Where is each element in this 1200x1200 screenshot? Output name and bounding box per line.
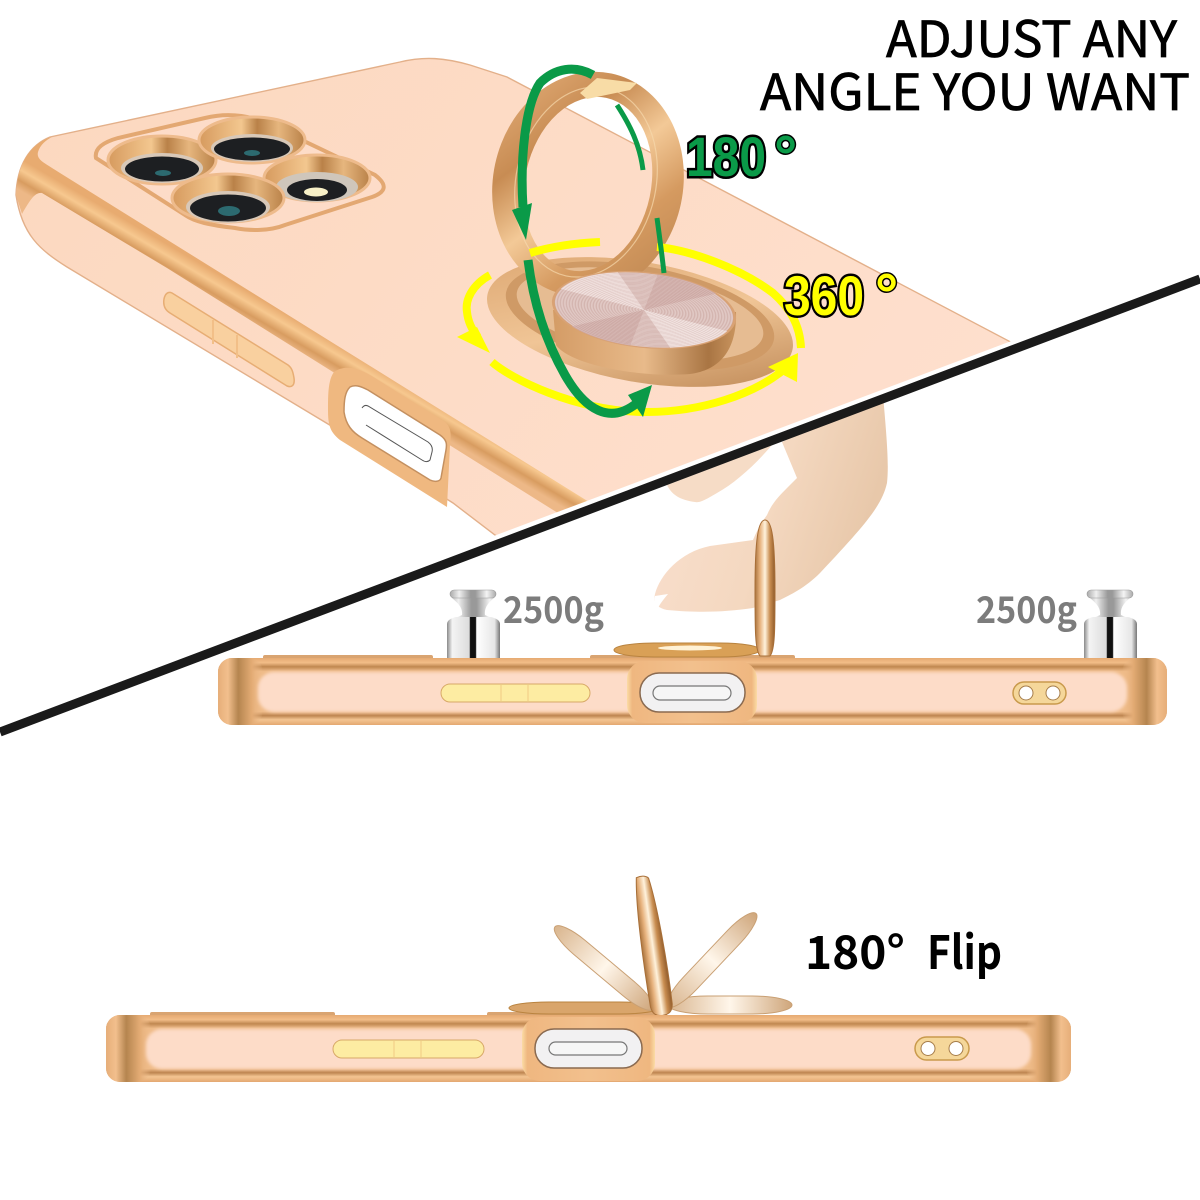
label: 2500g right: 2500g bbox=[976, 580, 1077, 634]
label: 180 degrees: ° bbox=[774, 124, 797, 189]
weight left bbox=[447, 590, 500, 658]
lens 1 bbox=[108, 136, 216, 184]
port bbox=[627, 661, 757, 723]
label: 180 degrees: 180 bbox=[686, 125, 766, 188]
volume button bbox=[441, 684, 590, 702]
camera module bbox=[96, 115, 384, 230]
gold rim bbox=[16, 137, 610, 530]
rotating disc bbox=[550, 263, 738, 375]
lens 3 flash bbox=[264, 155, 370, 202]
label: 2500g left: 2500g bbox=[503, 580, 604, 634]
volume button bbox=[164, 292, 294, 387]
green 180 degree flip arrows bbox=[512, 69, 664, 417]
flipped ring positions bbox=[549, 875, 792, 1017]
ring standing upright bbox=[472, 54, 704, 314]
speaker holes bbox=[915, 1037, 969, 1060]
port bbox=[522, 1017, 655, 1081]
ring holder base bbox=[477, 236, 803, 408]
title: ADJUST ANY bbox=[886, 0, 1177, 72]
label: 180 degree flip: Flip bbox=[927, 917, 1002, 983]
yellow 360 degree rotation arrows bbox=[457, 242, 801, 412]
title: ANGLE YOU WANT bbox=[760, 53, 1190, 125]
phone silhouette: back and side faces bbox=[15, 58, 1011, 536]
finger holding the ring bbox=[654, 395, 888, 612]
charging port housing bbox=[328, 368, 451, 507]
bottom phone side view bbox=[106, 875, 1071, 1082]
diagonal black divider bbox=[0, 279, 1200, 732]
flat disc bbox=[614, 643, 760, 657]
label: 180 degree flip: 180° bbox=[805, 917, 905, 983]
volume button bbox=[333, 1040, 484, 1058]
speaker holes bbox=[1013, 682, 1066, 704]
weight right bbox=[1084, 590, 1137, 658]
title bbox=[760, 0, 1190, 125]
flat disc bbox=[509, 1002, 659, 1014]
lens 2 bbox=[199, 117, 305, 163]
lens 4 bbox=[172, 174, 284, 223]
middle phone side view bbox=[218, 520, 1167, 725]
label: 360 degrees: ° bbox=[875, 262, 898, 327]
label: 360 degrees: 360 bbox=[784, 264, 864, 327]
vertical ring bbox=[755, 520, 775, 656]
top phone: perspective back view bbox=[15, 58, 1011, 536]
